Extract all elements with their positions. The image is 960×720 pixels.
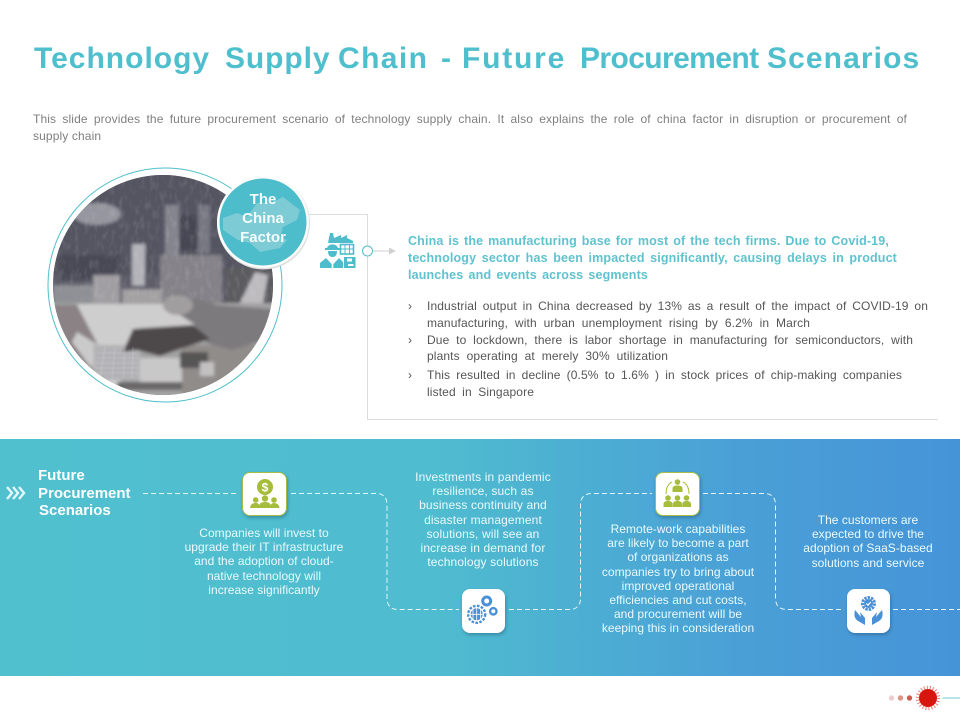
footer decoration: virus and dots (888, 686, 960, 710)
text: customers (803, 513, 933, 570)
text: investments (415, 470, 551, 569)
card: money people icon (242, 472, 287, 516)
title: Scenarios (767, 42, 920, 75)
icon: factory worker (320, 233, 356, 268)
card: globe gears icon (462, 589, 505, 633)
card: hands gear icon (847, 589, 890, 633)
intro text: This slide provides the future procurement scenario of technology supply chain. It also explains the role of china factor in disruption or procurement of (33, 112, 907, 126)
text: remote work: and procurement will be (614, 607, 742, 621)
text: remote work: improved operational (622, 579, 734, 593)
text: investments: solutions, will see an (427, 527, 539, 541)
text: investments: resilience, such as (432, 484, 534, 498)
badge: The China Factor: Factor (240, 229, 286, 246)
heading: future procurement scenarios: Scenarios (39, 502, 111, 519)
bullet list: › (408, 299, 412, 313)
text: customers: The customers are (818, 513, 918, 527)
panel: photo circle (48, 168, 282, 402)
text block: china headline (408, 234, 897, 282)
icon: chevrons (6, 486, 26, 500)
bullet list: manufacturing, with urban unemployment rising by 6.2% in March (427, 316, 810, 330)
text: remote work (602, 522, 754, 635)
text: companies (185, 526, 343, 597)
badge: The China Factor: The (250, 191, 276, 208)
bullet list: Due to lockdown, there is labor shortage in manufacturing for semiconductors, with (427, 333, 913, 347)
text: companies: upgrade their IT infrastructure (185, 540, 343, 554)
heading: future procurement scenarios: Future (38, 467, 85, 484)
text: remote work: efficiencies and cut costs, (609, 593, 747, 607)
intro text (33, 112, 907, 143)
title: Procurement (580, 42, 758, 75)
bullet list: › (408, 333, 412, 347)
dashed path (143, 493, 960, 610)
text: investments: business continuity and (419, 498, 547, 512)
bullet list: › (408, 368, 412, 382)
text: investments: technology solutions (427, 555, 539, 569)
bullet list: listed in Singapore (427, 385, 534, 399)
text block: china headline: China is the manufacturing base for most of the tech firms. Due to Covid-19, (408, 234, 889, 248)
title: Chain (338, 42, 428, 75)
text: companies: native technology will (207, 569, 321, 583)
text block: china headline: technology sector has been impacted significantly, causing delays in product (408, 251, 897, 265)
text: remote work: of organizations as (627, 550, 729, 564)
text: remote work: companies try to bring about (602, 565, 754, 579)
intro text: supply chain (33, 129, 101, 143)
card: remote team icon (655, 472, 700, 516)
bullet list: Industrial output in China decreased by 13% as a result of the impact of COVID-19 on (427, 299, 928, 313)
badge: The China Factor (217, 178, 310, 270)
text: remote work: keeping this in consideration (602, 621, 754, 635)
title (34, 42, 920, 75)
text: customers: solutions and service (812, 556, 924, 570)
arrow: connector to text (362, 246, 396, 256)
bullet list: This resulted in decline (0.5% to 1.6% ) in stock prices of chip-making companies (427, 368, 902, 382)
badge: The China Factor: China (242, 210, 284, 227)
text: remote work: Remote-work capabilities (611, 522, 745, 536)
text: companies: increase significantly (208, 583, 320, 597)
text: customers: expected to drive the (812, 527, 924, 541)
bullet list (408, 299, 928, 399)
text: investments: disaster management (424, 513, 542, 527)
panel: future procurement band (0, 439, 960, 676)
text: companies: Companies will invest to (199, 526, 329, 540)
text: customers: adoption of SaaS-based (803, 541, 933, 555)
connector frame line (309, 214, 938, 420)
title: - (441, 42, 451, 75)
heading: future procurement scenarios (38, 467, 131, 519)
text: investments: increase in demand for (421, 541, 545, 555)
text block: china headline: launches and events across segments (408, 268, 648, 282)
heading: future procurement scenarios: Procurement (38, 484, 131, 502)
title: Supply (225, 42, 330, 75)
text: investments: Investments in pandemic (415, 470, 551, 484)
title: Technology (34, 42, 210, 75)
text: companies: and the adoption of cloud- (194, 554, 334, 568)
card: money people icon: $ (262, 480, 269, 494)
title: Future (462, 42, 566, 75)
bullet list: plants operating at merely 30% utilization (427, 349, 668, 363)
text: remote work: are likely to become a part (607, 536, 749, 550)
